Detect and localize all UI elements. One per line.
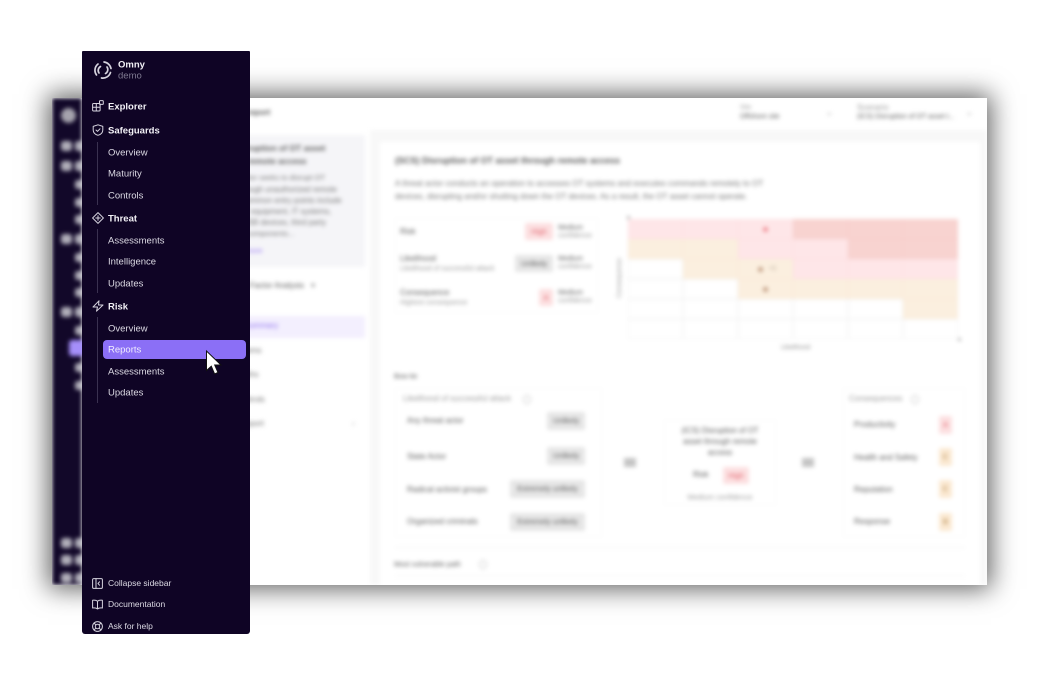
dropdown: scenario [856,102,973,122]
icon: info [479,560,487,569]
panel: bow-tie centre scenario: Medium confidence [687,492,753,501]
panel: blurred report screen: Summary [244,321,278,330]
panel: sidebar: Maturity [108,168,142,179]
panel: blurred report screen: assets through unauthorized remote [212,185,337,194]
panel: consequences: Health and Safety [854,453,918,462]
nav: Ask for help: Ask for help [108,621,153,631]
label: consequence axis: Consequence [616,258,623,298]
operator: right [802,458,814,467]
text block: scenario body [207,173,343,255]
icon: help lifebuoy [92,621,103,632]
panel: likelihood of successful attack: Any threat actor [407,416,463,425]
panel: likelihood of successful attack: Extremely unlikely [517,484,578,493]
panel: risk table: High [531,227,547,236]
panel: path box top [395,575,965,586]
text block: scenario title [212,142,328,167]
panel: likelihood of successful attack: Radical activist groups [407,485,487,494]
panel: consequences: Response [854,517,890,526]
heading: bow-tie: Bow-tie [394,374,417,380]
nav: Explorer: Explorer [108,101,147,112]
icon: shield [92,124,104,136]
panel: risk table: confidence [558,264,592,270]
panel: risk table: Medium [558,224,583,232]
panel: bow-tie centre scenario: (ICS) Disruption of OT [681,426,759,435]
panel: bow-tie centre scenario: asset through remote [683,437,757,446]
text block: scenario description [394,178,764,202]
panel: risk table: Likelihood of successful attack [400,266,495,272]
panel: blurred report screen [52,98,987,585]
chart: risk matrix [626,214,962,342]
panel: blurred report screen: Items [242,346,262,355]
row: risk: Risk [400,227,416,236]
panel: blurred report screen: portable USB devices, third party [212,218,326,227]
panel: sidebar: Updates [108,278,143,289]
panel: blurred report screen: Paths [238,370,258,379]
panel: bow-tie centre scenario: Risk [693,470,709,479]
brand subtitle: demo [118,70,142,81]
panel: risk table: A [543,293,548,302]
panel: sidebar: Assessments [108,235,164,246]
panel: risk table: Medium [558,290,583,296]
nav: assessments: Assessments [108,366,164,377]
nav: Threat: Threat [108,213,137,224]
panel: sidebar: Reports [108,344,141,355]
dropdown: site: Offshore site [740,114,780,120]
panel: blurred report screen: (ICS) Disruption of OT asset [212,143,325,153]
divider [395,547,965,548]
dropdown: site [738,103,833,121]
rail: threat [96,229,98,293]
panel: likelihood of successful attack: Unlikely [553,451,579,460]
panel: consequences: A [943,420,948,429]
operator: left [624,458,636,467]
panel: consequences: C [943,484,948,493]
dropdown: scenario: ⌄ [966,108,973,117]
panel: sidebar [82,51,250,634]
panel: risk table: Medium [558,256,583,262]
icon: Omny logo [94,61,112,79]
panel: likelihood of successful attack: Extremely unlikely [517,517,578,526]
text block: scenario description: devices, disrupting and/or shutting down the OT devices. As a result, the OT asset cannot operate. [395,192,747,201]
panel: blurred report screen: Controls [235,395,265,404]
panel: consequences: Reputation [854,485,893,494]
chart: risk matrix: +1 [769,265,776,272]
panel: blurred report screen: Report [240,419,264,428]
panel: likelihood of successful attack: Organized criminals [407,517,478,526]
panel: risk table [395,218,598,313]
panel: likelihood of successful attack [395,388,602,537]
panel: likelihood of successful attack: State Actor [407,452,446,461]
panel: risk table: Highest consequence [400,300,467,306]
heading: page title: Risk report [228,108,270,117]
icon: risk bolt [92,300,104,312]
brand name: Omny [118,59,145,70]
panel: likelihood of successful attack: Likelihood of successful attack [403,394,511,403]
panel: blurred report screen: A threat actor seeks to disrupt OT [212,173,325,182]
navigation: factor analysis: Risk Factor Analysis [232,281,304,290]
nav: safeguards items [108,147,148,201]
label: likelihood axis: Likelihood [781,344,810,351]
panel: blurred report screen: ▾ [311,281,315,290]
panel: consequences: Productivity [854,420,895,429]
panel: risk table: confidence [558,298,592,304]
icon: blurred logo [61,108,76,123]
dropdown: scenario: (ICS) Disruption of OT asset t... [857,114,955,120]
icon: mouse cursor [206,350,222,374]
panel: bow-tie centre scenario [664,420,776,505]
panel: sidebar: Overview [108,147,148,158]
panel: consequences: Consequences [849,394,902,403]
panel: bow-tie centre scenario: High [728,471,744,480]
icon: explorer [92,100,104,112]
nav: Documentation: Documentation [108,599,165,609]
panel: sidebar: Intelligence [108,256,156,267]
navigation: active summary [200,316,365,338]
panel: likelihood of successful attack: Unlikely [553,416,579,425]
heading: scenario title: (SCS) Disruption of OT asset through remote access [395,156,620,166]
text block: scenario description: A threat actor conducts an operation to accesses OT systems and executes commands remotely to OT [395,179,763,188]
panel: risk table: Unlikely [521,259,547,268]
panel: blurred report screen: software or components... [207,229,294,238]
icon: collapse sidebar [92,578,103,589]
nav: Collapse sidebar: Collapse sidebar [108,578,171,588]
row: likelihood: Likelihood [400,254,436,263]
dropdown: site: Site [740,104,751,111]
nav: overview: Overview [108,323,148,334]
row: consequence: Consequence [400,288,449,297]
panel: bow-tie centre scenario: access [708,448,732,457]
panel: blurred report screen: › [352,419,355,428]
nav: updates: Updates [108,387,143,398]
dropdown: site: ⌄ [826,108,833,117]
panel: consequences: C [943,452,948,461]
icon: documentation book [92,600,103,610]
heading: most vulnerable path: Most vulnerable path [394,559,461,568]
nav: Risk: Risk [108,301,128,312]
menu placeholders [58,138,82,585]
rail: risk [96,317,98,403]
navigation: other items [235,346,355,429]
panel: blurred report screen: access. Common entry points include [212,196,342,205]
icon: threat [92,212,104,224]
nav: active Reports [103,340,246,359]
panel: blurred collapsed sidebar behind [52,98,82,585]
nav: Safeguards: Safeguards [108,125,160,136]
panel: risk table: confidence [558,232,592,240]
panel: consequences: B [943,517,948,526]
dropdown: scenario: Scenario [857,103,889,112]
panel: blurred report screen: vendor OT equipment, IT systems, [212,207,331,216]
panel: blurred report screen: through remote access [213,156,307,166]
panel: consequences [843,388,965,537]
panel: main content background [370,130,987,585]
rail: safeguards [96,142,98,205]
panel: left scenario summary [200,135,365,267]
panel: main white card [380,142,980,585]
panel: sidebar: Controls [108,190,143,201]
nav: threat items [108,235,164,289]
panel: blurred report screen: Read more [225,246,263,255]
